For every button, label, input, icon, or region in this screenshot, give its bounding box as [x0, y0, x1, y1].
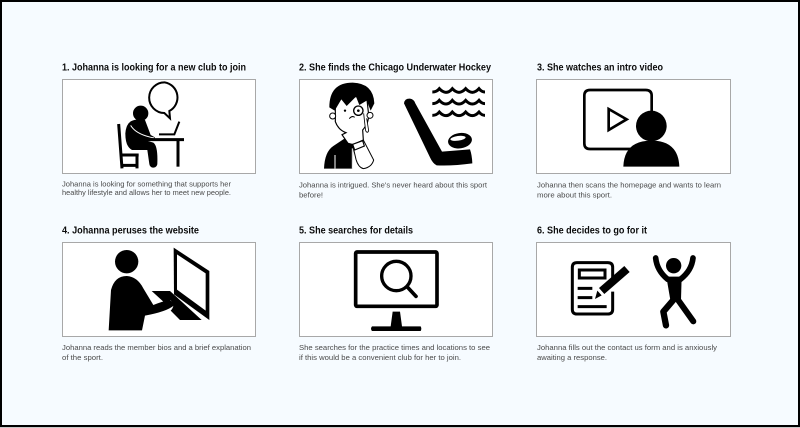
heading: step 3: 3. She watches an intro video [537, 62, 663, 74]
icon: curious person with monocle [324, 83, 374, 169]
panel: step 6 [536, 226, 730, 362]
icon: water waves [432, 89, 485, 116]
heading: step 5: 5. She searches for details [299, 226, 413, 236]
heading: step 2: 2. She finds the Chicago Underwater Hockey [299, 62, 492, 74]
image frame: step 6 [536, 242, 730, 336]
icon: video player and viewer [584, 90, 679, 167]
icon: hockey stick and puck [404, 99, 473, 165]
panel: step 1 [62, 62, 256, 197]
icon: person at desk with laptop and thought bubble [119, 82, 184, 168]
description: step 3 [537, 180, 721, 200]
heading: step 1: 1. Johanna is looking for a new club to join [62, 62, 246, 74]
description: step 5: She searches for the practice times and locations to see [299, 343, 490, 352]
description: step 1 [62, 180, 232, 197]
description: step 3: Johanna then scans the homepage and wants to learn [537, 180, 721, 190]
description: step 5 [299, 343, 490, 362]
panel: step 5 [299, 226, 492, 362]
panel: step 3 [536, 62, 730, 200]
image frame: step 4 [62, 242, 256, 336]
heading: step 6: 6. She decides to go for it [537, 226, 648, 236]
description: step 2 [299, 180, 487, 200]
panel: step 2 [299, 62, 492, 200]
heading: step 4: 4. Johanna peruses the website [62, 226, 200, 236]
description: step 6: awaiting a response. [537, 353, 607, 362]
description: step 4 [62, 343, 251, 362]
description: step 3: more about this sport. [537, 190, 612, 200]
description: step 6 [537, 343, 717, 362]
image frame: step 3 [536, 80, 730, 174]
image frame: step 1 [62, 80, 256, 174]
panel: step 4 [62, 226, 256, 362]
description: step 1: healthy lifestyle and allows her to meet new people. [62, 188, 231, 197]
icon: monitor with magnifying glass [356, 252, 437, 331]
description: step 5: if this would be a convenient club for her to join. [299, 353, 461, 362]
description: step 4: of the sport. [62, 353, 103, 362]
icon: jumping person [656, 258, 693, 325]
description: step 4: Johanna reads the member bios and a brief explanation [62, 343, 251, 352]
image frame: step 5 [300, 242, 492, 336]
icon: form and pencil [572, 263, 630, 314]
image frame: step 2 [300, 80, 492, 174]
description: step 6: Johanna fills out the contact us form and is anxiously [537, 343, 717, 352]
description: step 1: Johanna is looking for something that supports her [62, 180, 232, 188]
icon: person at computer [109, 248, 209, 330]
description: step 2: before! [299, 190, 323, 200]
description: step 2: Johanna is intrigued. She's never heard about this sport [299, 180, 487, 190]
